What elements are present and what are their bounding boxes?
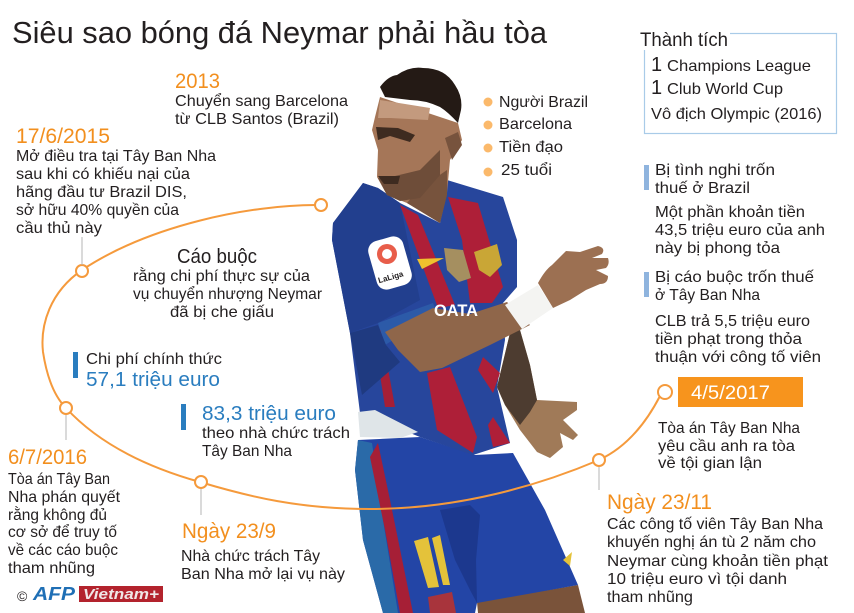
orange timeline ellipse <box>42 199 672 509</box>
timeline leader lines <box>66 237 599 515</box>
Spain tax allegation: CLB trả 5,5 triệu euro <box>655 313 810 330</box>
panel: achievements: Club World Cup <box>667 81 783 98</box>
event: Ngày 23/11: 10 triệu euro vì tội danh <box>607 571 787 588</box>
Spain tax allegation: tiền phạt trong thỏa <box>655 331 802 348</box>
event: 6/7/2016: rằng không đủ <box>8 505 107 524</box>
eyes and brow <box>376 127 415 184</box>
allegation text <box>133 246 323 321</box>
jersey <box>332 180 517 455</box>
allegation text: Cáo buộc <box>177 246 257 268</box>
panel: achievements: Champions League <box>667 58 811 75</box>
neck and face <box>372 97 462 223</box>
event: 4/5/2017 text <box>658 420 800 472</box>
Spain tax allegation: ở Tây Ban Nha <box>655 287 760 304</box>
Spain tax allegation <box>644 269 821 366</box>
event: 17/6/2015: sau khi có khiếu nại của <box>16 166 190 183</box>
footer credit: AFP and Vietnam+: © <box>17 588 28 604</box>
beard shadow <box>378 150 440 201</box>
wristband <box>505 285 553 329</box>
hair <box>380 68 461 123</box>
footer credit: AFP and Vietnam+ <box>17 584 163 604</box>
event: Ngày 23/9: Ngày 23/9 <box>182 520 276 543</box>
footer credit: AFP and Vietnam+: AFP <box>32 584 76 604</box>
authority estimate: Tây Ban Nha <box>202 443 292 460</box>
player profile bullets: Tiền đạo <box>499 139 563 156</box>
footer credit: AFP and Vietnam+: Vietnam+ <box>83 586 159 603</box>
player profile bullets <box>484 94 588 179</box>
player profile bullets: Người Brazil <box>499 94 588 111</box>
allegation text: đã bị che giấu <box>170 304 274 321</box>
official cost: 57,1 triệu euro <box>86 369 220 391</box>
event: Ngày 23/11: tham nhũng <box>607 589 693 606</box>
authority estimate: theo nhà chức trách <box>202 425 350 442</box>
event: 6/7/2016: Nha phán quyết <box>8 489 121 506</box>
event: Ngày 23/11: Ngày 23/11 <box>607 491 712 514</box>
event: 4/5/2017 text: yêu cầu anh ra tòa <box>658 438 795 455</box>
left arm <box>385 302 530 372</box>
Spain tax allegation: Bị cáo buộc trốn thuế <box>655 269 814 286</box>
jersey details: badges: LaLiga <box>377 269 405 285</box>
player photo: Neymar <box>332 68 609 613</box>
event: Ngày 23/9 <box>181 520 345 583</box>
Brazil tax suspicion <box>644 162 825 257</box>
event: 17/6/2015 <box>16 125 216 237</box>
player right hand and wrist <box>497 246 609 458</box>
event: 17/6/2015: sở hữu 40% quyền của <box>16 202 179 219</box>
player profile bullets: Barcelona <box>499 116 572 133</box>
jersey details: badges: OATA <box>434 301 478 320</box>
event: 17/6/2015: 17/6/2015 <box>16 125 110 148</box>
Brazil tax suspicion: Bị tình nghi trốn <box>655 162 775 179</box>
event: 6/7/2016: tham nhũng <box>8 560 95 577</box>
event: 4/5/2017 date box: 4/5/2017 <box>691 383 770 404</box>
Brazil tax suspicion: thuế ở Brazil <box>655 180 750 197</box>
official cost: Chi phí chính thức <box>86 351 222 368</box>
event: 17/6/2015: cầu thủ này <box>16 220 102 237</box>
event: Ngày 23/11: khuyến nghị án tù 2 năm cho <box>607 534 816 551</box>
event: Ngày 23/11: Neymar cùng khoản tiền phạt <box>607 553 829 570</box>
event: 2013: 2013 <box>175 70 220 93</box>
panel: achievements: 1 <box>651 54 662 76</box>
title: Siêu sao bóng đá Neymar phải hầu tòa <box>12 15 548 50</box>
panel: achievements: Vô địch Olympic (2016) <box>651 106 822 123</box>
event: 2013 <box>175 70 348 128</box>
event: 2013: Chuyển sang Barcelona <box>175 92 348 110</box>
event: 17/6/2015: Mở điều tra tại Tây Ban Nha <box>16 148 216 165</box>
jersey details: badges <box>366 234 502 320</box>
event: Ngày 23/9: Ban Nha mở lại vụ này <box>181 566 345 583</box>
event: Ngày 23/11 <box>607 491 829 606</box>
event: 6/7/2016: cơ sở để truy tố <box>8 523 117 541</box>
player profile bullets: 25 tuổi <box>501 161 552 179</box>
event: 6/7/2016: Tòa án Tây Ban <box>8 471 110 488</box>
event: 4/5/2017 text: Tòa án Tây Ban Nha <box>658 420 800 437</box>
forehead highlight <box>378 100 430 120</box>
Brazil tax suspicion: Một phần khoản tiền <box>655 204 805 221</box>
Brazil tax suspicion: này bị phong tỏa <box>655 240 780 257</box>
panel: achievements <box>638 28 836 134</box>
panel: achievements: Thành tích <box>640 30 728 51</box>
authority estimate <box>181 403 350 460</box>
authority estimate: 83,3 triệu euro <box>202 403 336 425</box>
event: Ngày 23/11: Các công tố viên Tây Ban Nha <box>607 516 823 533</box>
event: 17/6/2015: hãng đầu tư Brazil DIS, <box>16 184 187 201</box>
ear and neck shadow <box>407 132 462 223</box>
allegation text: vụ chuyển nhượng Neymar <box>133 285 323 303</box>
Spain tax allegation: thuận với công tố viên <box>655 349 821 366</box>
event: 4/5/2017 text: về tội gian lận <box>658 455 762 472</box>
event: 6/7/2016: 6/7/2016 <box>8 446 87 469</box>
event: 4/5/2017 date box <box>678 377 803 407</box>
panel: achievements: 1 <box>651 77 662 99</box>
shorts <box>355 437 585 613</box>
event: 6/7/2016: về các cáo buộc <box>8 542 118 559</box>
event: 2013: từ CLB Santos (Brazil) <box>175 111 339 128</box>
official cost <box>73 351 222 391</box>
event: Ngày 23/9: Nhà chức trách Tây <box>181 548 320 565</box>
Brazil tax suspicion: 43,5 triệu euro của anh <box>655 222 825 239</box>
allegation text: rằng chi phí thực sự của <box>133 266 310 285</box>
event: 6/7/2016 <box>8 446 121 577</box>
